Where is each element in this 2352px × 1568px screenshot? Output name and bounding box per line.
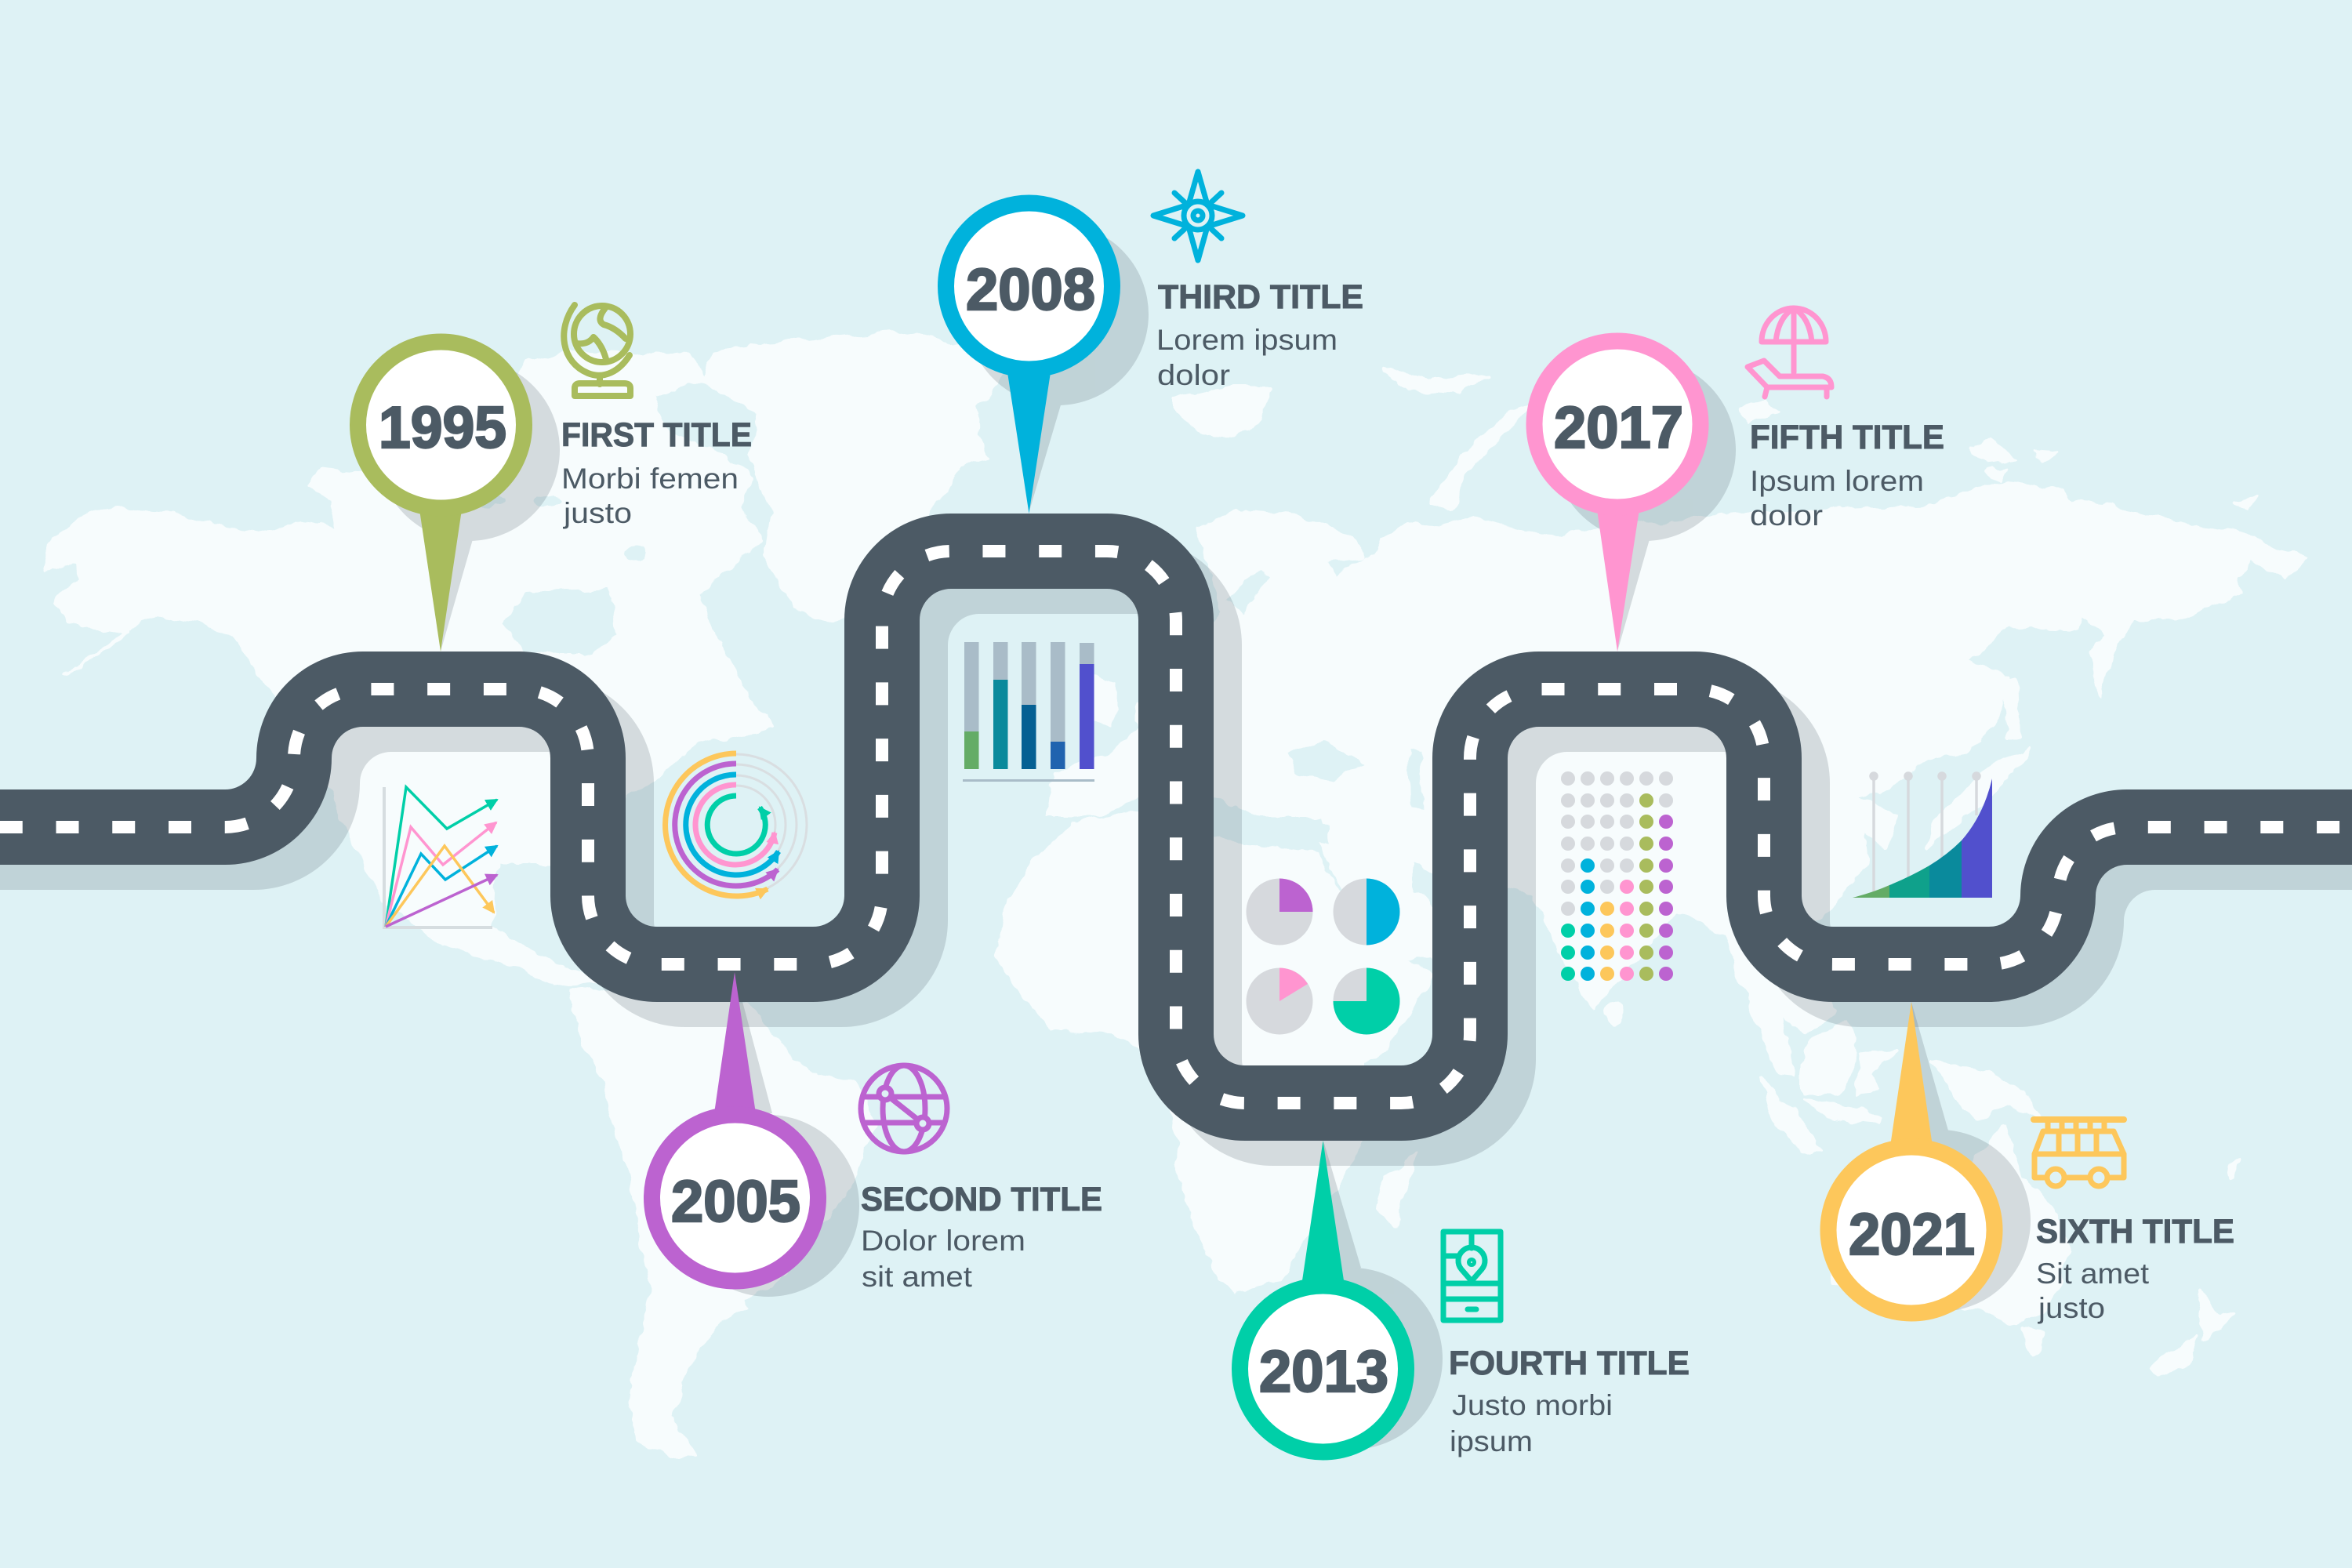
icon: van with roof rack — [2034, 1120, 2124, 1186]
fifth title text: FIFTH TITLE — [1750, 419, 1944, 456]
pin 2021 — [1828, 1002, 1994, 1313]
second title text: SECOND TITLE — [861, 1181, 1102, 1218]
winding road — [0, 551, 2352, 1103]
pin 2017: 2017 — [1554, 394, 1683, 460]
fourth title text: Justo morbi — [1452, 1389, 1613, 1421]
south east asia and oceania — [1762, 1019, 2238, 1376]
icon: compass star — [1153, 172, 1243, 260]
pin 2021: 2021 — [1849, 1201, 1975, 1267]
sixth title text — [2036, 1213, 2234, 1324]
pin 2013 — [1240, 1141, 1406, 1452]
pin shadow 2005 — [677, 972, 859, 1297]
third title text: THIRD TITLE — [1158, 278, 1363, 316]
south america — [572, 988, 876, 1457]
dot matrix chart — [1568, 779, 1666, 974]
hudson bay — [503, 588, 615, 654]
pin 2013: 2013 — [1259, 1338, 1388, 1404]
pin shadow 2017 — [1554, 359, 1736, 652]
icon: network globe — [861, 1065, 947, 1152]
eurasia — [1048, 484, 2305, 1074]
pin 1995 — [358, 342, 524, 652]
road shadow — [0, 576, 2352, 1128]
icon: beach umbrella and lounger — [1748, 308, 1831, 397]
fifth title text — [1750, 419, 1944, 532]
line chart — [384, 787, 497, 927]
arctic lakes — [624, 545, 646, 561]
fifth title text: Ipsum lorem — [1750, 465, 1924, 497]
third title text: dolor — [1157, 359, 1230, 391]
pie charts — [1247, 878, 1400, 1035]
bar chart — [963, 642, 1094, 782]
sixth title text: justo — [2038, 1292, 2105, 1324]
first title text — [561, 416, 752, 529]
pin 2008 — [946, 203, 1112, 514]
pin 2017 — [1534, 341, 1700, 652]
fourth title text: ipsum — [1450, 1425, 1533, 1457]
third title text: Lorem ipsum — [1156, 324, 1338, 356]
sixth title text: Sit amet — [2036, 1258, 2150, 1290]
pin shadow 2008 — [967, 223, 1149, 514]
pin 2005: 2005 — [671, 1168, 800, 1234]
area chart — [1853, 773, 1992, 898]
mediterranean sea — [1243, 815, 1330, 843]
icon: phone map — [1443, 1232, 1501, 1320]
pin 1995: 1995 — [379, 394, 506, 460]
pin shadow 2013 — [1261, 1141, 1443, 1450]
baltic sea — [1229, 568, 1270, 615]
second title text — [861, 1181, 1102, 1293]
second title text: Dolor lorem — [861, 1225, 1025, 1257]
third title text — [1156, 278, 1363, 391]
greenland — [706, 333, 1006, 623]
caspian sea — [1409, 749, 1424, 814]
fifth title text: dolor — [1750, 499, 1823, 532]
arabia — [1321, 843, 1446, 960]
north america — [45, 351, 773, 984]
pin 2005 — [652, 972, 818, 1281]
radial progress chart — [666, 753, 807, 896]
madagascar and indian ocean islands — [1375, 1002, 1621, 1227]
arctic and pacific islands — [1087, 368, 2258, 848]
fourth title text — [1449, 1345, 1690, 1457]
black sea — [1289, 741, 1363, 781]
pin 2008: 2008 — [966, 256, 1095, 322]
second title text: sit amet — [862, 1261, 973, 1293]
first title text: Morbi femen — [561, 463, 739, 495]
africa — [998, 814, 1432, 1293]
pin shadow 2021 — [1849, 1002, 2031, 1312]
first title text: FIRST TITLE — [561, 416, 752, 454]
world map — [45, 333, 2305, 1457]
first title text: justo — [563, 497, 632, 529]
sixth title text: SIXTH TITLE — [2036, 1213, 2234, 1250]
pin shadows — [378, 359, 560, 652]
icon: desk globe — [564, 305, 630, 396]
fourth title text: FOURTH TITLE — [1449, 1345, 1690, 1382]
